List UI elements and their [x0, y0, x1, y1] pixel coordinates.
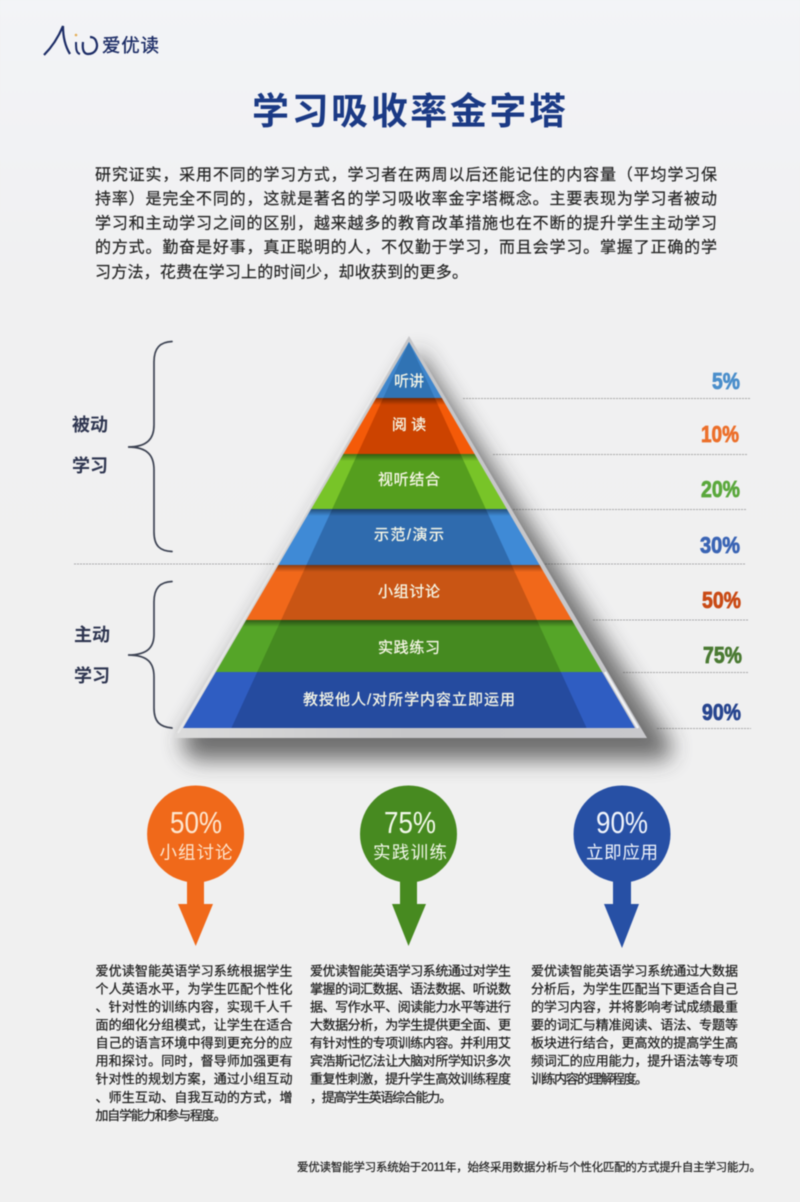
text column: 小组讨论: 、师生互动、自我互动的方式，增 [96, 1090, 292, 1105]
band: 视听结合: 视听结合 [378, 472, 440, 488]
intro text block: 习方法，花费在学习上的时间少，却收获到的更多。 [95, 264, 468, 282]
band: 示范/演示 [278, 509, 540, 565]
intro text block: 研究证实，采用不同的学习方式，学习者在两周以后还能记住的内容量（平均学习保 [95, 166, 717, 184]
percentage labels: 90% [702, 699, 741, 725]
callout pin: 50% 小组讨论 [147, 786, 244, 946]
text column: 实践训练 [310, 964, 511, 1105]
text column: 小组讨论: 个人英语水平，为学生匹配个性化 [96, 982, 292, 996]
text column: 小组讨论: 、针对性的训练内容，实现千人千 [96, 1000, 292, 1014]
text column: 实践训练: 大数据分析，为学生提供更全面、更 [310, 1018, 511, 1032]
text column: 实践训练: 爱优读智能英语学习系统通过对学生 [310, 964, 511, 978]
text column: 小组讨论: 自己的语言环境中得到更充分的应 [96, 1036, 292, 1050]
band: 小组讨论: 小组讨论 [378, 584, 440, 600]
brace: passive learning [128, 342, 172, 552]
band: 小组讨论 [246, 565, 572, 620]
band: 阅读 [343, 398, 475, 454]
band: 视听结合 [311, 454, 507, 509]
label: 被动学习 [72, 415, 108, 476]
percentage labels: 75% [703, 642, 742, 668]
dashed guide lines [74, 398, 751, 728]
callout pin: 75% 实践训练: 实践训练 [373, 842, 447, 862]
intro text block [95, 166, 717, 282]
pyramid [173, 336, 672, 760]
text column: 实践训练: 有针对性的专项训练内容。并利用艾 [310, 1036, 511, 1050]
intro text block: 持率）是完全不同的，这就是著名的学习吸收率金字塔概念。主要表现为学习者被动 [95, 189, 717, 208]
callout pin: 90% 立即应用 [574, 786, 670, 948]
text column: 立即应用: 要的词汇与精准阅读、语法、专题等 [531, 1018, 738, 1032]
text column: 实践训练: ，提高学生英语综合能力。 [310, 1090, 452, 1105]
band: 示范/演示: 示范/演示 [374, 526, 444, 544]
percentage labels: 30% [700, 532, 740, 558]
percentage labels: 20% [701, 476, 740, 502]
text column: 实践训练: 重复性刺激，提升学生高效训练程度 [310, 1072, 511, 1086]
callout pin: 75% 实践训练: 75% [384, 805, 436, 840]
logo: 爱优读 [44, 26, 159, 56]
percentage labels: 5% [712, 368, 740, 394]
callout pin: 50% 小组讨论: 50% [170, 805, 222, 840]
text column: 小组讨论: 面的细化分组模式，让学生在适合 [96, 1018, 292, 1032]
callout pin: 90% 立即应用: 立即应用 [586, 842, 658, 862]
text column: 小组讨论: 用和探讨。同时，督导师加强更有 [96, 1054, 292, 1068]
intro text block: 的方式。勤奋是好事，真正聪明的人，不仅勤于学习，而且会学习。掌握了正确的学 [95, 238, 717, 256]
callout pin: 90% 立即应用: 90% [596, 805, 648, 840]
brace: active learning [128, 582, 172, 728]
text column: 小组讨论: 加自学能力和参与程度。 [96, 1108, 226, 1123]
title: 学习吸收率金字塔 [252, 91, 566, 132]
intro text block: 学习和主动学习之间的区别，越来越多的教育改革措施也在不断的提升学生主动学习 [95, 214, 717, 232]
label: 被动学习: 学习 [72, 455, 108, 476]
text column: 实践训练: 掌握的词汇数据、语法数据、听说数 [310, 982, 511, 996]
band: 实践练习: 实践练习 [378, 640, 440, 656]
band: 听讲 [376, 342, 442, 398]
band: 实践练习 [216, 620, 602, 672]
text column: 立即应用: 板块进行结合，更高效的提高学生高 [531, 1036, 738, 1050]
text column: 立即应用: 频词汇的应用能力，提升语法等专项 [531, 1054, 738, 1068]
text column: 立即应用: 训练内容的理解程度。 [531, 1072, 648, 1086]
pyramid shadow [180, 350, 672, 760]
percentage labels [700, 368, 742, 725]
text column: 立即应用: 分析后，为学生匹配当下更适合自己 [531, 982, 738, 996]
band: 教授他人/对所学内容立即运用 [183, 672, 635, 728]
band: 听讲: 听讲 [394, 373, 424, 390]
footer note: 爱优读智能学习系统始于2011年，始终采用数据分析与个性化匹配的方式提升自主学习能力。 [297, 1160, 761, 1174]
band: 阅读: 阅 读 [392, 416, 426, 434]
text column: 立即应用: 爱优读智能英语学习系统通过大数据 [531, 964, 738, 978]
label: 主动学习: 学习 [74, 665, 110, 686]
text column: 立即应用: 的学习内容，并将影响考试成绩最重 [531, 1000, 738, 1014]
percentage labels: 10% [701, 421, 739, 447]
percentage labels: 50% [702, 587, 741, 613]
pyramid frame [173, 336, 647, 738]
label: 主动学习 [74, 625, 110, 686]
text column: 立即应用 [531, 964, 738, 1086]
text column: 小组讨论 [96, 964, 292, 1123]
label: 被动学习: 被动 [72, 415, 108, 435]
text column: 小组讨论: 针对性的规划方案，通过小组互动 [96, 1072, 292, 1086]
label: 主动学习: 主动 [74, 625, 110, 645]
band: 教授他人/对所学内容立即运用: 教授他人/对所学内容立即运用 [303, 692, 515, 708]
text column: 实践训练: 据、写作水平、阅读能力水平等进行 [310, 1000, 511, 1014]
callout pin: 75% 实践训练 [360, 786, 457, 946]
text column: 小组讨论: 爱优读智能英语学习系统根据学生 [96, 964, 292, 978]
text column: 实践训练: 宾浩斯记忆法让大脑对所学知识多次 [310, 1054, 511, 1068]
logo: 爱优读: 爱优读 [102, 35, 159, 56]
callout pin: 50% 小组讨论: 小组讨论 [160, 842, 233, 862]
